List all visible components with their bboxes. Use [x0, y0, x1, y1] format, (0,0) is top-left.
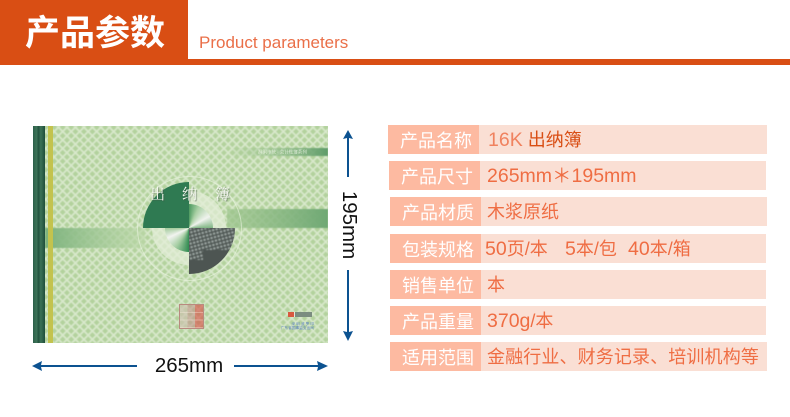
row: weight: 产品重量	[402, 312, 474, 332]
row: packaging: 包装规格	[402, 240, 474, 260]
row: product size	[389, 161, 766, 190]
arrow up	[343, 130, 353, 177]
cover lattice pattern and bands	[45, 126, 328, 343]
product photo: ledger book cover	[33, 126, 328, 343]
publisher text: 深 圳 波 罗 印	[291, 322, 314, 326]
row: material	[390, 197, 767, 226]
row: product name: 产品名称	[400, 131, 472, 151]
header banner	[0, 0, 790, 65]
row: packaging: 5本/包	[565, 238, 617, 260]
row: weight	[390, 306, 766, 335]
row: sales unit: 销售单位	[402, 276, 474, 296]
book title	[150, 186, 230, 203]
row: material: 产品材质	[402, 203, 474, 223]
book title: 出	[150, 187, 165, 203]
arrow right	[234, 361, 328, 371]
thin outer ring	[137, 176, 242, 281]
row: sales unit: 本	[487, 275, 505, 295]
row: material: 木浆原纸	[487, 202, 559, 222]
row: product size: 265mm＊195mm	[487, 165, 637, 187]
row: packaging: 50页/本	[485, 238, 548, 260]
row: product name: 16K 出纳簿	[488, 129, 582, 151]
row: applicable scope	[390, 342, 767, 371]
width label: 265mm	[155, 354, 223, 377]
row: applicable scope: 金融行业、财务记录、培训机构等	[487, 347, 759, 367]
arrow left	[32, 361, 137, 371]
yellow binding strip	[48, 126, 53, 343]
publisher text	[280, 322, 314, 330]
metallic inner disc	[165, 204, 213, 252]
row: applicable scope: 适用范围	[402, 348, 474, 368]
row: product size: 产品尺寸	[401, 167, 473, 187]
row: sales unit	[390, 270, 766, 299]
series caption: 洞洞市统 · 会计账簿系列	[258, 150, 307, 154]
pale disc	[152, 191, 226, 265]
green quarter	[143, 182, 189, 228]
red seal	[179, 304, 204, 329]
keyboard keys	[189, 228, 235, 260]
publisher logo	[288, 312, 312, 317]
dimension: height 195mm	[338, 130, 361, 341]
book title: 簿	[215, 187, 230, 203]
publisher text: 广东省国事监支出间	[281, 326, 314, 330]
header orange bar	[0, 59, 790, 65]
spine	[33, 126, 45, 343]
circular emblem	[137, 176, 242, 281]
parameter table	[388, 125, 767, 371]
arrow down	[343, 270, 353, 341]
header title tab: 产品参数	[25, 14, 165, 53]
header title tab	[0, 0, 188, 65]
dimension: width 265mm	[32, 354, 328, 377]
keyboard photo quarter	[189, 228, 235, 274]
row: packaging	[390, 234, 766, 263]
row: weight: 370g/本	[487, 310, 553, 332]
row: packaging: 40本/箱	[628, 238, 691, 260]
row: product name	[388, 125, 767, 154]
book title: 纳	[182, 187, 197, 203]
header subtitle: Product parameters	[199, 33, 348, 52]
height label: 195mm	[338, 191, 361, 259]
